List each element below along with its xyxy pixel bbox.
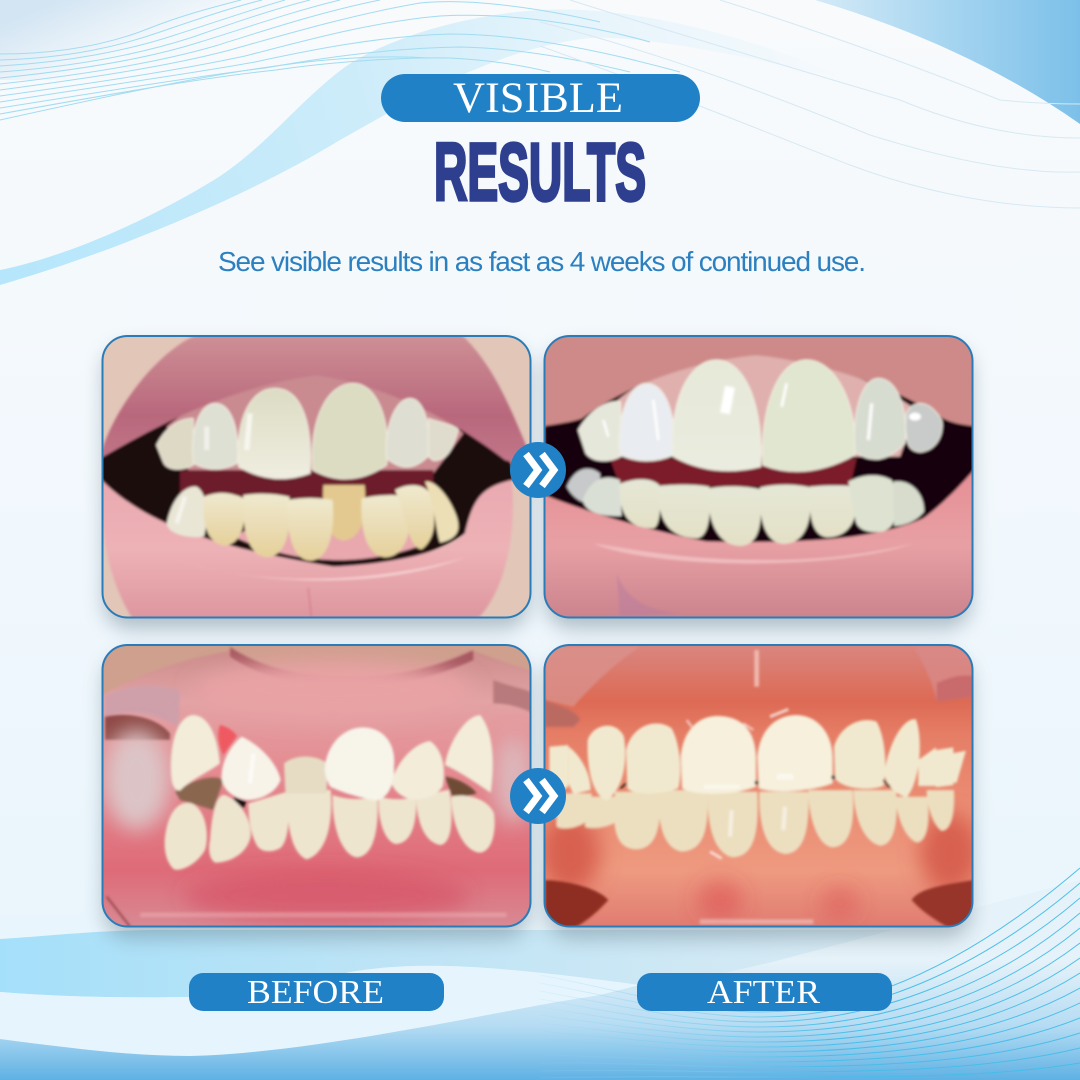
- upper gum: [607, 355, 917, 457]
- cheeks and soft tissue: [545, 647, 640, 707]
- panel: after photo, bottom: [540, 645, 980, 928]
- panel: after photo, top: [540, 330, 980, 627]
- title pill: VISIBLE: VISIBLE: [453, 75, 623, 122]
- label pill: BEFORE: BEFORE: [247, 974, 384, 1011]
- lower teeth: [165, 790, 495, 870]
- heading: RESULTS: RESULTS: [434, 127, 646, 218]
- subtitle: See visible results in as fast as 4 weeks of continued use.: [218, 246, 866, 277]
- label pill: AFTER: [637, 973, 892, 1011]
- card shadows: [104, 347, 971, 938]
- label pill: AFTER: AFTER: [707, 974, 820, 1011]
- upper teeth: [549, 715, 966, 801]
- lower lip: [100, 478, 513, 620]
- gum strip: [180, 470, 433, 498]
- wave lines top left: [0, 0, 680, 120]
- upper teeth: [171, 715, 493, 801]
- gum strip: [610, 458, 857, 487]
- arrow badge: bottom row: [510, 768, 566, 824]
- title pill: VISIBLE: [381, 74, 700, 122]
- photo borders: [102, 336, 972, 926]
- lower teeth: [557, 790, 954, 857]
- wave lines top right: [540, 0, 1080, 208]
- upper lip: [546, 356, 972, 428]
- tooth details: [704, 784, 740, 789]
- panel: before photo, bottom: [100, 640, 540, 927]
- tooth highlights: [247, 413, 250, 450]
- wave lines bottom right: [540, 868, 1080, 1078]
- upper gum: [167, 373, 463, 473]
- label pill: BEFORE: [189, 973, 444, 1011]
- lower lip: [546, 469, 972, 616]
- arrow badge: top row: [510, 442, 566, 498]
- tooth gaps: [175, 777, 223, 810]
- lower gum: [233, 520, 427, 560]
- gums: [205, 656, 462, 696]
- upper lip: [100, 333, 537, 470]
- mouth interior: [104, 416, 512, 568]
- tooth highlight: [250, 753, 253, 783]
- lower teeth: [323, 485, 365, 541]
- upper teeth: [157, 383, 458, 479]
- panel: before photo, top: [100, 333, 537, 620]
- tooth highlights: [725, 387, 730, 413]
- lip and cheek retractor: [104, 646, 530, 694]
- mouth interior: [546, 380, 972, 544]
- upper teeth: [578, 360, 942, 471]
- lower teeth: [567, 469, 600, 504]
